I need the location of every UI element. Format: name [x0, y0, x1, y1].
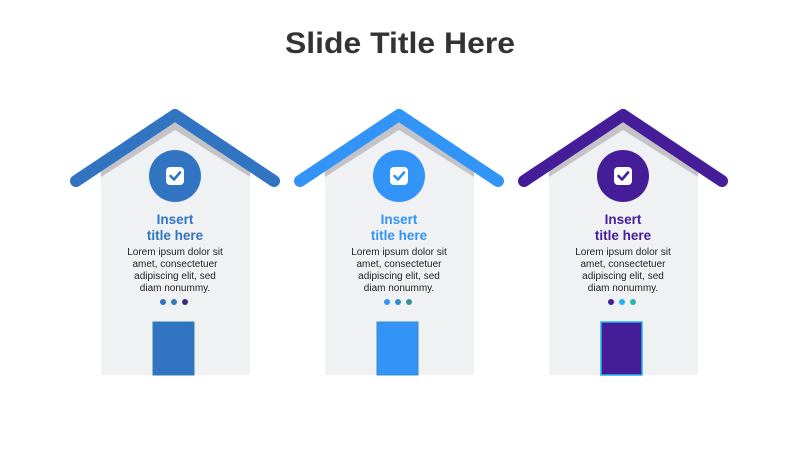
roof shadow: [101, 120, 250, 177]
body text: diam nonummy.: [364, 283, 434, 294]
dots: [160, 299, 188, 305]
house 2: [300, 115, 498, 375]
body text: Lorem ipsum dolor sit: [127, 247, 223, 258]
roof: [524, 115, 722, 181]
heading: title here: [147, 228, 204, 243]
roof shadow: [549, 120, 698, 177]
roof: [300, 115, 498, 181]
heading: title here: [371, 228, 428, 243]
icon: check: [373, 150, 425, 202]
heading: title here: [595, 228, 652, 243]
icon: check: [597, 150, 649, 202]
body text: amet, consectetuer: [132, 259, 218, 270]
body text: Lorem ipsum dolor sit: [575, 247, 671, 258]
body text: adipiscing elit, sed: [134, 271, 216, 282]
dots: [608, 299, 636, 305]
heading: Insert: [157, 212, 194, 227]
wall: [549, 128, 698, 375]
wall: [325, 128, 474, 375]
body text: adipiscing elit, sed: [582, 271, 664, 282]
icon: check: [149, 150, 201, 202]
door: [601, 322, 642, 375]
heading: Insert: [381, 212, 418, 227]
roof: [76, 115, 274, 181]
house 3: [524, 115, 722, 375]
body text: diam nonummy.: [588, 283, 658, 294]
body text: Lorem ipsum dolor sit: [351, 247, 447, 258]
roof shadow: [325, 120, 474, 177]
door: [153, 322, 194, 375]
heading: Insert: [605, 212, 642, 227]
door: [377, 322, 418, 375]
wall: [101, 128, 250, 375]
house 1: [76, 115, 274, 375]
body text: adipiscing elit, sed: [358, 271, 440, 282]
body text: amet, consectetuer: [356, 259, 442, 270]
body text: amet, consectetuer: [580, 259, 666, 270]
title: Slide Title Here: [285, 27, 515, 60]
body text: diam nonummy.: [140, 283, 210, 294]
dots: [384, 299, 412, 305]
